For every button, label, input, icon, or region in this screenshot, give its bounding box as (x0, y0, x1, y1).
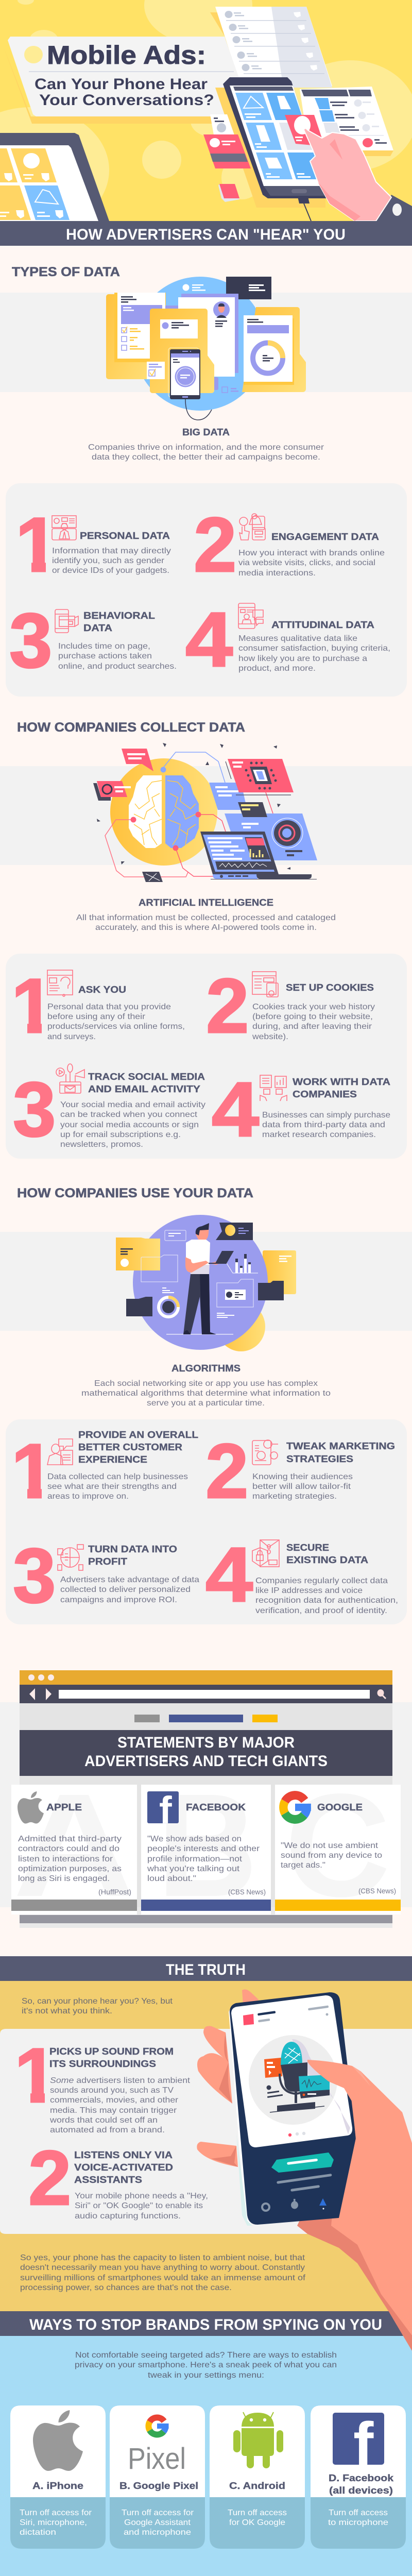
card: apple: (HuffPost) (98, 1888, 131, 1896)
item 2: engagement data: via website visits, clicks, and social (238, 558, 375, 567)
section: the truth background (0, 1981, 412, 2311)
card: android: Turn off access (228, 2509, 287, 2517)
item 4: work with data companies (212, 1066, 390, 1153)
big data text: Companies thrive on information, and the more consumer (88, 443, 324, 452)
item 4: secure existing data: Companies regularly collect data (255, 1577, 388, 1585)
item 2: listens via assistants: Your mobile phone needs a "Hey, (75, 2192, 208, 2200)
ways intro text: tweak in your settings menu: (148, 2371, 264, 2380)
ways intro text: Not comfortable seeing targeted ads? There are ways to establish (75, 2351, 337, 2360)
card: facebook: FACEBOOK (186, 1802, 246, 1812)
item 4: work with data companies: data from third-party data and (262, 1121, 385, 1129)
item 1: picks up sound: commercials, movies, and other (50, 2096, 179, 2105)
intro text: it's not what you think. (22, 2007, 112, 2015)
algorithms text (81, 1363, 331, 1408)
item 2: listens via assistants: 2 (28, 2134, 71, 2221)
banner: ways to stop brands: WAYS TO STOP BRANDS FROM SPYING ON YOU (29, 2316, 382, 2333)
item 2: set up cookies: (before going to their website, (252, 1012, 373, 1021)
card: facebook: loud about." (147, 1874, 196, 1883)
phone (223, 77, 329, 221)
item 2: listens via assistants: audio capturing functions. (75, 2212, 181, 2221)
tablet (0, 133, 109, 221)
panel: how companies collect data (6, 954, 407, 1159)
section: ways background (0, 2336, 412, 2576)
artificial intelligence text (76, 897, 336, 932)
item 1: ask you: and surveys. (47, 1032, 96, 1041)
panel: types of data (6, 483, 407, 697)
item 3: behavioral data: DATA (83, 623, 112, 633)
item 3: track social media: AND EMAIL ACTIVITY (88, 1084, 200, 1094)
artificial intelligence text: ARTIFICIAL INTELLIGENCE (139, 897, 273, 908)
card: facebook all devices: f (353, 2410, 374, 2478)
big data text: data they collect, the better their ad campaigns become. (92, 453, 320, 462)
item 1: ask you: 1 (11, 962, 54, 1049)
item 1: picks up sound: 1 (14, 2032, 57, 2119)
item 1: picks up sound: Some advertisers listen to ambient (50, 2076, 191, 2085)
item 1: personal data: 1 (15, 501, 58, 588)
card: android: C. Android (229, 2481, 285, 2491)
item 3: behavioral data: 3 (9, 597, 52, 684)
item 4: attitudinal data: product, and more. (238, 664, 316, 673)
card: google pixel: Pixel (128, 2442, 186, 2476)
intro text: So, can your phone hear you? Yes, but (22, 1997, 173, 2006)
item 4: work with data companies: market research companies. (262, 1130, 376, 1139)
item 4: secure existing data: EXISTING DATA (286, 1555, 368, 1565)
item 3: turn data into profit: TURN DATA INTO (88, 1544, 177, 1554)
card: apple: Admitted that third-party (18, 1835, 122, 1843)
intro text (22, 1997, 173, 2015)
card: google pixel: B. Google Pixel (119, 2481, 198, 2491)
item 2: set up cookies: 2 (206, 962, 249, 1049)
item 1: customer experience: PROVIDE AN OVERALL (78, 1430, 198, 1440)
item 1: customer experience: Data collected can help businesses (47, 1472, 188, 1481)
algorithms text: Each social networking site or app you use has complex (94, 1379, 318, 1388)
item 2: listens via assistants: VOICE-ACTIVATED (74, 2162, 173, 2173)
item 2: set up cookies: Cookies track your web history (252, 1003, 375, 1011)
item 1: ask you (15, 970, 184, 1041)
card: iphone: A. iPhone (32, 2481, 83, 2491)
card: google: "We do not use ambient (281, 1841, 379, 1850)
item 2: engagement data: ENGAGEMENT DATA (271, 532, 379, 542)
banner: statements by major advertisers and tech giants: ADVERTISERS AND TECH GIANTS (84, 1753, 328, 1770)
card: google pixel: Google Assistant (124, 2518, 191, 2527)
item 4: secure existing data: recognition data for authentication, (255, 1596, 398, 1605)
closing text: surveilling millions of smartphones would take an immense amount of (20, 2274, 306, 2282)
item 1: picks up sound: automated ad from a brand. (50, 2126, 165, 2134)
card: facebook all devices (311, 2405, 406, 2549)
item 3: turn data into profit: collected to deliver personalized (60, 1585, 191, 1594)
item 1: ask you: ASK YOU (78, 985, 126, 995)
item 3: behavioral data: online, and product searches. (58, 662, 177, 671)
banner: ways to stop brands (0, 2311, 412, 2336)
card: facebook: "We show ads based on (147, 1835, 242, 1843)
item 1: ask you: products/services via online forms, (47, 1022, 185, 1031)
item 3: turn data into profit: Advertisers take advantage of data (60, 1575, 199, 1584)
item 1: customer experience (15, 1431, 198, 1500)
item 1: personal data: identify you, such as gender (52, 556, 165, 565)
item 2: tweak marketing strategies: STRATEGIES (286, 1454, 353, 1464)
panel: how companies use your data (6, 1419, 407, 1624)
card: android: for OK Google (229, 2518, 285, 2527)
card: apple: listen to interactions for (18, 1855, 113, 1863)
card: android (210, 2405, 305, 2549)
item 2: tweak marketing strategies: marketing strategies. (252, 1492, 337, 1501)
heading: how companies use your data: HOW COMPANIES USE YOUR DATA (17, 1186, 253, 1200)
item 1: customer experience: see what are their strengths and (47, 1482, 177, 1491)
item 2: set up cookies: during, and after leaving their (252, 1022, 372, 1031)
heading: how companies collect data: HOW COMPANIES COLLECT DATA (17, 720, 245, 735)
item 2: set up cookies: website). (252, 1032, 288, 1041)
card: facebook: (CBS News) (228, 1888, 266, 1896)
item 2: tweak marketing strategies (205, 1428, 395, 1514)
item 2: listens via assistants: ASSISTANTS (74, 2175, 142, 2185)
section banner: how advertisers can hear you: HOW ADVERTISERS CAN "HEAR" YOU (66, 226, 346, 243)
item 3: track social media: 3 (13, 1066, 56, 1153)
item 2: listens via assistants (28, 2134, 208, 2221)
item 1: personal data: Information that may directly (52, 547, 171, 555)
banner: the truth: THE TRUTH (166, 1961, 246, 1978)
item 4: work with data companies: Businesses can simply purchase (262, 1111, 390, 1120)
item 1: customer experience: 1 (11, 1428, 54, 1514)
item 3: behavioral data (9, 597, 177, 684)
title text: Mobile Ads: (47, 41, 206, 70)
card: apple: contractors could and do (18, 1844, 119, 1853)
item 1: customer experience: areas to improve on. (47, 1492, 129, 1501)
item 4: secure existing data (205, 1531, 398, 1618)
item 4: attitudinal data: Measures qualitative data like (238, 634, 357, 643)
item 1: picks up sound (19, 2047, 190, 2132)
card: facebook: people's interests and other (147, 1844, 260, 1853)
item 1: ask you: Personal data that you provide (47, 1003, 171, 1011)
card: facebook all devices: (all devices) (329, 2485, 393, 2496)
item 4: attitudinal data: consumer satisfaction, buying criteria, (238, 644, 390, 653)
item 1: personal data: PERSONAL DATA (80, 531, 170, 541)
item 2: tweak marketing strategies: TWEAK MARKETING (286, 1441, 395, 1451)
item 2: engagement data: media interactions. (238, 569, 316, 578)
item 2: set up cookies (206, 962, 375, 1049)
closing text: doesn't necessarily mean you have anything to worry about. Constantly (20, 2263, 305, 2272)
item 2: listens via assistants: Siri" or "OK Google" to enable its (75, 2201, 203, 2210)
banner: statements by major advertisers and tech giants: STATEMENTS BY MAJOR (117, 1734, 295, 1751)
algorithms text: ALGORITHMS (171, 1363, 241, 1374)
card: facebook: profile information—not (147, 1855, 243, 1863)
item 1: picks up sound: ITS SURROUNDINGS (49, 2059, 156, 2069)
card: google: C (285, 1764, 390, 1927)
item 2: tweak marketing strategies: better will allow tailor-fit (252, 1482, 351, 1491)
card: google: sound from any device to (281, 1851, 382, 1860)
title card (4, 37, 252, 124)
item 1: personal data (20, 515, 171, 575)
card: facebook: f (159, 1789, 172, 1832)
item 3: turn data into profit: PROFIT (88, 1556, 127, 1567)
artificial intelligence text: All that information must be collected, processed and cataloged (76, 913, 336, 922)
item 3: track social media: newsletters, promos. (60, 1140, 143, 1149)
ways intro text: privacy on your smartphone. Here's a sneak peek of what you can (75, 2361, 337, 2369)
big data text (88, 427, 324, 462)
item 1: customer experience: EXPERIENCE (78, 1454, 147, 1465)
item 1: personal data: or device IDs of your gadgets. (52, 566, 169, 575)
card: facebook all devices: D. Facebook (329, 2473, 394, 2483)
illustration: artificial intelligence (0, 743, 412, 882)
item 1: picks up sound: PICKS UP SOUND FROM (49, 2046, 174, 2057)
item 3: behavioral data: purchase actions taken (58, 652, 152, 660)
document list (210, 7, 332, 88)
banner: the truth (0, 1956, 412, 1981)
item 2: set up cookies: SET UP COOKIES (286, 982, 374, 993)
card: iphone: Turn off access for (20, 2509, 92, 2517)
item 2: engagement data (194, 501, 385, 588)
illustration: big data (0, 277, 412, 420)
microphone (264, 2042, 330, 2112)
banner: statements by major advertisers and tech giants (20, 1730, 392, 1776)
card: iphone (10, 2405, 106, 2549)
item 1: picks up sound: sounds around you, such as TV (50, 2086, 174, 2095)
item 3: track social media: TRACK SOCIAL MEDIA (88, 1072, 205, 1082)
item 3: turn data into profit: 3 (13, 1532, 56, 1619)
card: facebook all devices: Turn off access (329, 2509, 388, 2517)
hero illustration (0, 0, 412, 233)
item 1: customer experience: BETTER CUSTOMER (78, 1442, 182, 1452)
item 3: track social media: can be tracked when you connect (60, 1110, 198, 1119)
item 4: attitudinal data: ATTITUDINAL DATA (271, 620, 374, 630)
card: facebook: B (157, 1764, 258, 1927)
item 4: attitudinal data (185, 596, 390, 683)
artificial intelligence text: accurately, and this is where AI-powered tools come in. (95, 923, 317, 932)
algorithms text: mathematical algorithms that determine what information to (81, 1389, 331, 1398)
item 3: track social media: your social media accounts or sign (60, 1121, 199, 1129)
heading: types of data: TYPES OF DATA (12, 265, 120, 279)
item 4: secure existing data: SECURE (286, 1543, 329, 1553)
item 3: turn data into profit (13, 1532, 199, 1619)
item 4: attitudinal data: 4 (185, 596, 233, 683)
item 2: engagement data: 2 (194, 501, 236, 588)
side cards (203, 87, 393, 208)
card: facebook all devices: to microphone (328, 2518, 388, 2527)
item 3: behavioral data: Includes time on page, (58, 642, 150, 651)
card: apple: optimization purposes, as (18, 1865, 122, 1873)
item 1: ask you: before using any of their (47, 1012, 146, 1021)
closing text (20, 2253, 306, 2292)
item 4: work with data companies: 4 (212, 1066, 259, 1153)
card: google pixel: and microphone (124, 2528, 191, 2537)
item 4: work with data companies: COMPANIES (293, 1089, 357, 1099)
item 2: tweak marketing strategies: Knowing their audiences (252, 1472, 353, 1481)
closing text: So yes, your phone has the capacity to listen to ambient noise, but that (20, 2253, 305, 2262)
illustration: hand holding phone (197, 1989, 412, 2351)
big data text: BIG DATA (182, 427, 230, 437)
item 3: track social media (13, 1064, 205, 1153)
item 4: work with data companies: WORK WITH DATA (293, 1077, 390, 1087)
card: iphone: dictation (20, 2528, 56, 2537)
card: iphone: Siri, microphone, (20, 2518, 87, 2527)
card: google: (CBS News) (358, 1887, 396, 1895)
person (183, 1223, 234, 1334)
illustration: algorithms (0, 1215, 412, 1351)
item 4: secure existing data: verification, and proof of identity. (255, 1606, 387, 1615)
browser panel: statements (0, 1670, 412, 1928)
ways intro text (75, 2351, 337, 2380)
item 4: attitudinal data: how likely you are to purchase a (238, 654, 367, 663)
card: google: GOOGLE (317, 1802, 363, 1812)
card: google pixel: Turn off access for (122, 2509, 194, 2517)
item 2: listens via assistants: LISTENS ONLY VIA (74, 2150, 173, 2160)
item 2: tweak marketing strategies: 2 (205, 1428, 248, 1514)
item 3: track social media: up for email subscriptions e.g. (60, 1130, 181, 1139)
subtitle line 1: Can Your Phone Hear (35, 76, 208, 93)
item 2: engagement data: How you interact with brands online (238, 549, 385, 557)
item 4: secure existing data: 4 (205, 1531, 253, 1618)
card: google pixel (110, 2405, 205, 2549)
item 1: picks up sound: words that could set off an (49, 2116, 158, 2125)
card: apple: A (13, 1764, 135, 1927)
algorithms text: serve you at a particular time. (147, 1399, 265, 1408)
item 3: track social media: Your social media and email activity (60, 1100, 205, 1109)
card: apple: long as Siri is engaged. (18, 1874, 110, 1883)
item 4: secure existing data: like IP addresses and voice (255, 1586, 363, 1595)
item 3: behavioral data: BEHAVIORAL (83, 611, 155, 621)
section banner: how advertisers can hear you (0, 221, 412, 246)
card: facebook: what you're talking out (147, 1865, 240, 1873)
item 1: picks up sound: media. This may contain trigger (50, 2106, 177, 2115)
closing text: processing power, so chances are that's not the case. (20, 2283, 232, 2292)
hand with red card (285, 115, 412, 221)
item 3: turn data into profit: campaigns and improve ROI. (60, 1596, 177, 1604)
card: google: target ads." (281, 1861, 325, 1870)
subtitle line 2: Your Conversations? (39, 92, 214, 109)
card: apple: APPLE (46, 1802, 82, 1812)
